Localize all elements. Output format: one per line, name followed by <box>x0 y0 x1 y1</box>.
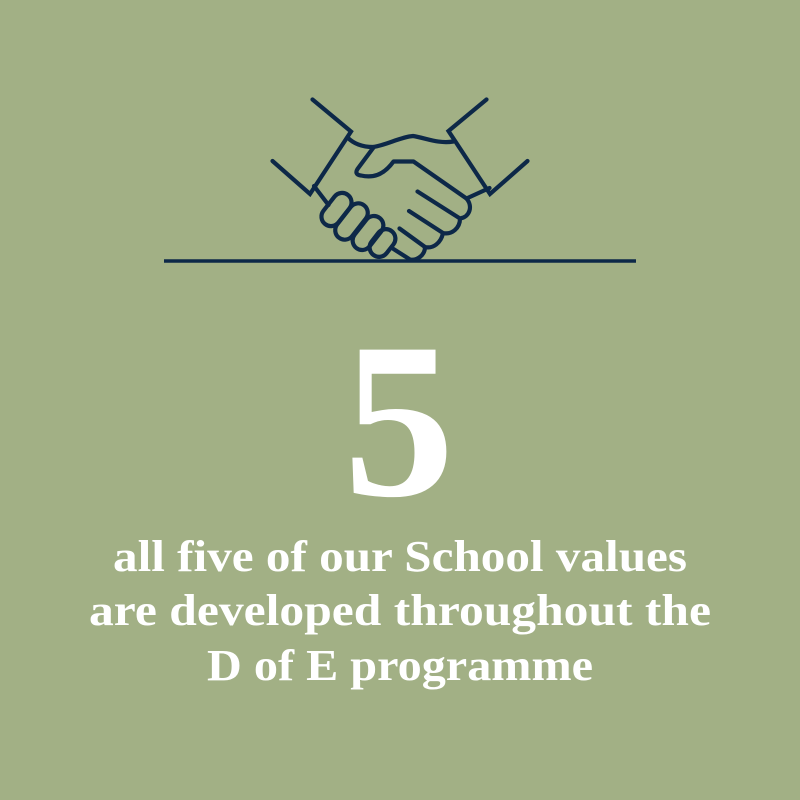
right cuff <box>448 100 528 194</box>
wrists <box>314 186 490 205</box>
left cuff <box>272 100 351 194</box>
caption <box>89 532 711 690</box>
finger 1 <box>318 189 355 230</box>
finger 3 <box>349 212 387 254</box>
caption line 1: all five of our School values <box>113 532 687 581</box>
top of hands <box>348 136 454 147</box>
caption line 2: are developed throughout the <box>89 586 711 635</box>
caption line 3: D of E programme <box>207 641 593 690</box>
horizontal rule <box>164 259 636 263</box>
big number: 5 <box>344 298 454 544</box>
left hand fingers <box>318 189 399 261</box>
finger 2 <box>331 199 372 244</box>
finger 4 <box>366 225 399 261</box>
thumb and right hand <box>356 148 470 260</box>
icon: handshake <box>272 100 528 261</box>
